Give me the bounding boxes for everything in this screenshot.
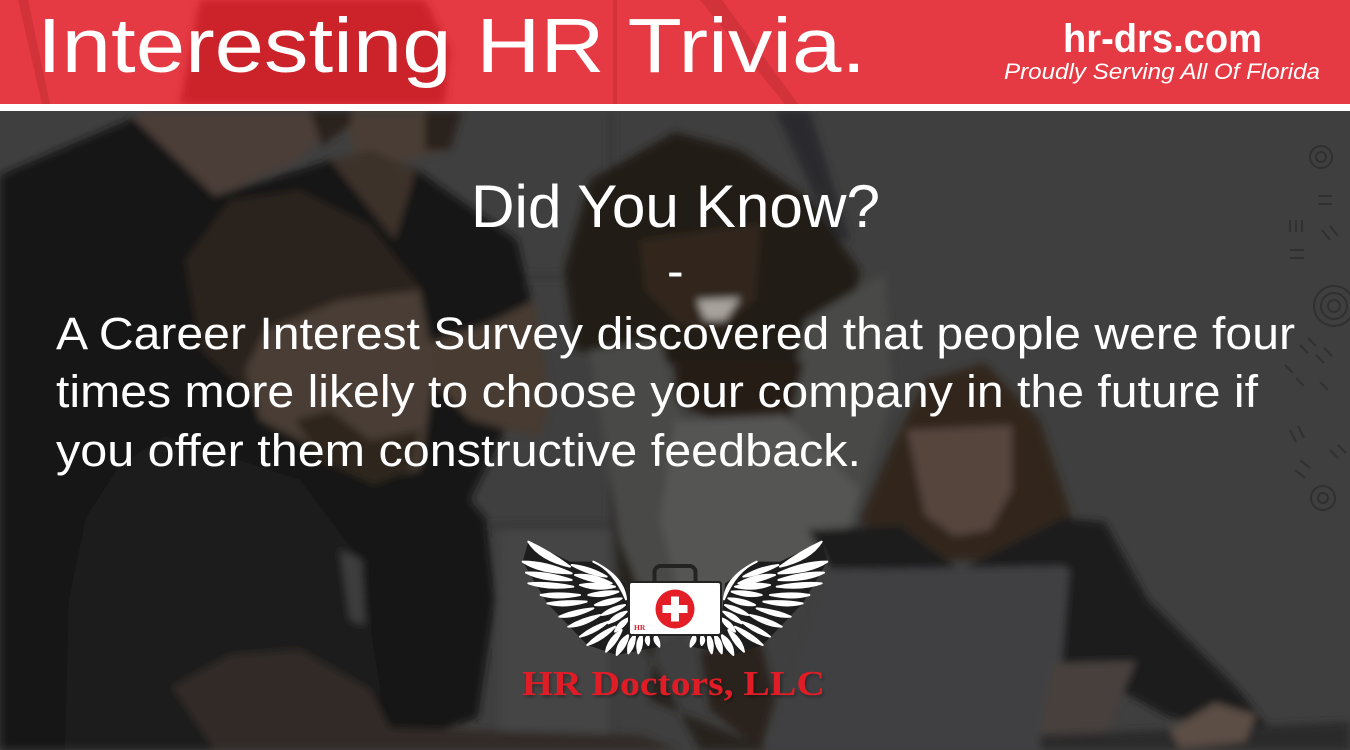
icon: winged medical kit: HR bbox=[634, 623, 646, 632]
header band bbox=[0, 0, 1350, 111]
header divider bbox=[0, 104, 1350, 111]
heading: did you know: Did You Know? bbox=[471, 173, 880, 240]
blazer bbox=[808, 518, 1270, 730]
black woman hair bbox=[564, 132, 860, 372]
seated man shirt bbox=[65, 436, 380, 750]
body text: times more likely to choose your company in the future if bbox=[56, 366, 1258, 417]
seated man hair bbox=[185, 190, 422, 390]
seated man face bbox=[245, 290, 435, 480]
brunette face bbox=[907, 425, 1012, 536]
window frames bbox=[490, 524, 612, 528]
eye chart marks bbox=[1285, 146, 1350, 510]
company name: HR Doctors, LLC bbox=[522, 664, 825, 703]
brunette hair bbox=[860, 363, 1093, 640]
hand bbox=[1170, 703, 1256, 748]
website: hr-drs.com bbox=[1063, 17, 1262, 61]
dark clothing mass on the left bbox=[0, 118, 534, 750]
hand at laptop bbox=[700, 640, 775, 750]
tagline: Proudly Serving All Of Florida bbox=[1004, 59, 1320, 84]
chest and top bbox=[675, 360, 804, 425]
icon: winged medical kit bbox=[523, 542, 827, 655]
body text bbox=[56, 308, 1295, 476]
body text: A Career Interest Survey discovered that people were four bbox=[56, 308, 1295, 359]
dash separator: - bbox=[667, 243, 684, 299]
notebook bbox=[1039, 661, 1136, 747]
body text: you offer them constructive feedback. bbox=[56, 425, 861, 476]
title: Interesting HR Trivia. bbox=[37, 3, 866, 89]
woman's dark arm bbox=[610, 470, 770, 750]
second man face and hair bbox=[345, 111, 456, 168]
seated man arm bbox=[172, 650, 680, 750]
cardigan bbox=[590, 273, 892, 640]
black woman face bbox=[640, 224, 761, 330]
laptop bbox=[768, 566, 1069, 750]
man 1 neck and face bbox=[133, 111, 345, 196]
crossed arms bbox=[430, 300, 551, 438]
logo: HR Doctors bbox=[522, 542, 827, 703]
